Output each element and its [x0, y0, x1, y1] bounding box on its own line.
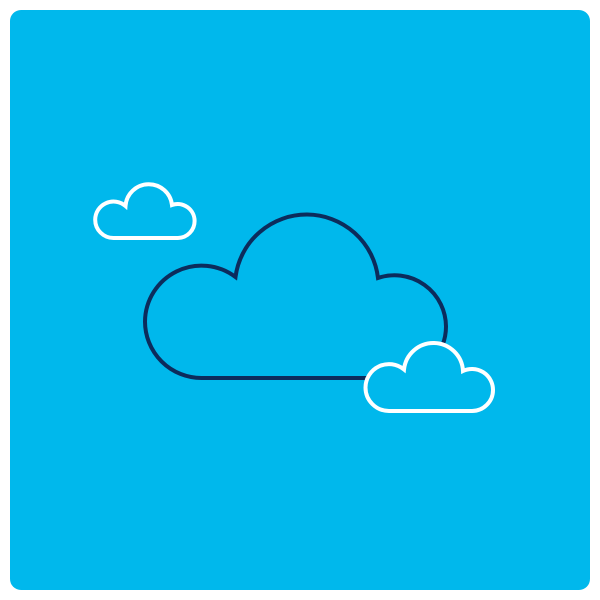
icon: large navy cloud	[145, 215, 446, 378]
icon: small white cloud top left	[95, 184, 195, 238]
icon: white cloud bottom right	[366, 343, 493, 411]
